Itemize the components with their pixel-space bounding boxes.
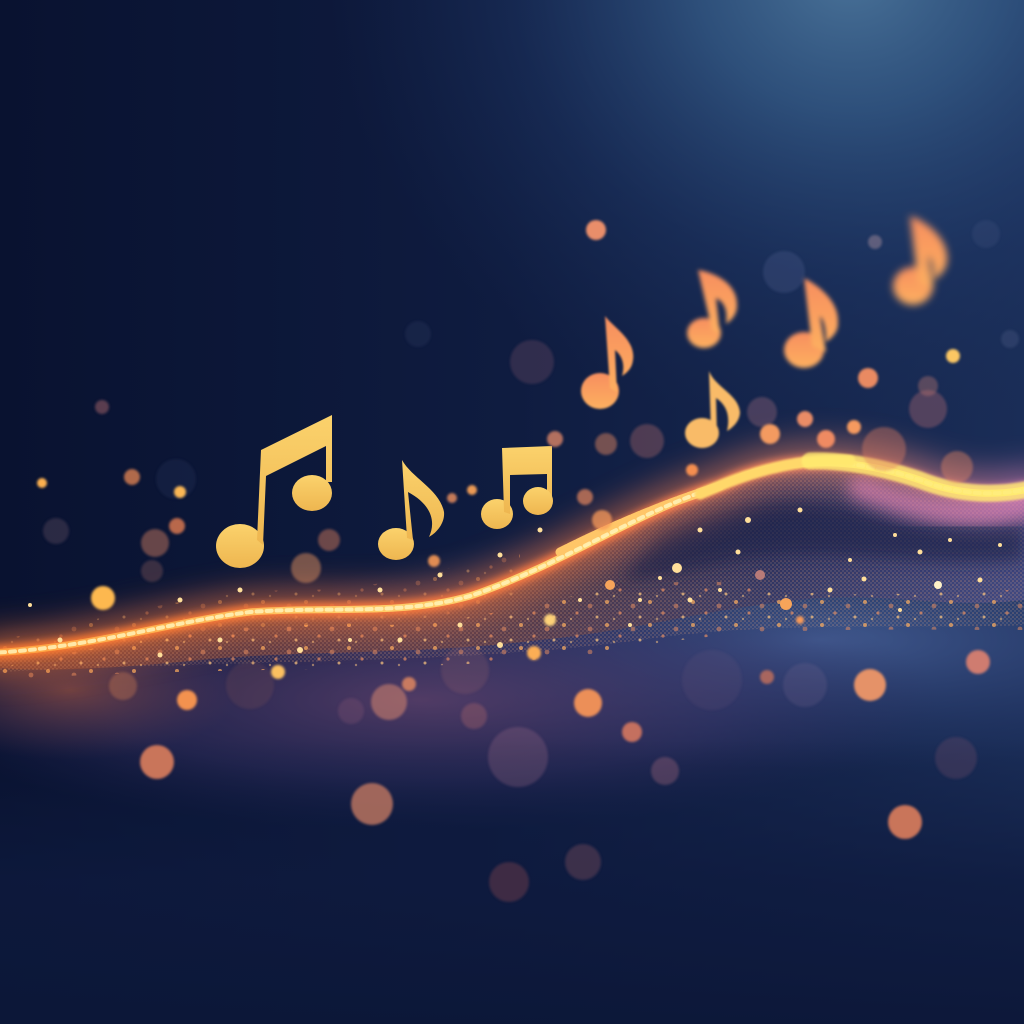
music note: small beamed pair xyxy=(481,446,553,529)
bokeh: bright round lights xyxy=(37,220,990,839)
glowing wave line xyxy=(0,460,1024,653)
music note: large beamed pair xyxy=(216,415,332,568)
music note: soft orange lower xyxy=(685,371,740,448)
bokeh: large soft lights xyxy=(43,220,1019,902)
particle hill under the wave xyxy=(0,468,1024,680)
music note: blurred right xyxy=(784,278,838,368)
music note: soft orange upper xyxy=(687,270,737,348)
music note: blurred far right xyxy=(893,216,947,305)
music note: soft orange mid xyxy=(581,316,633,409)
sparkles on the particle field xyxy=(28,508,1002,658)
music note: eighth note xyxy=(378,460,444,560)
